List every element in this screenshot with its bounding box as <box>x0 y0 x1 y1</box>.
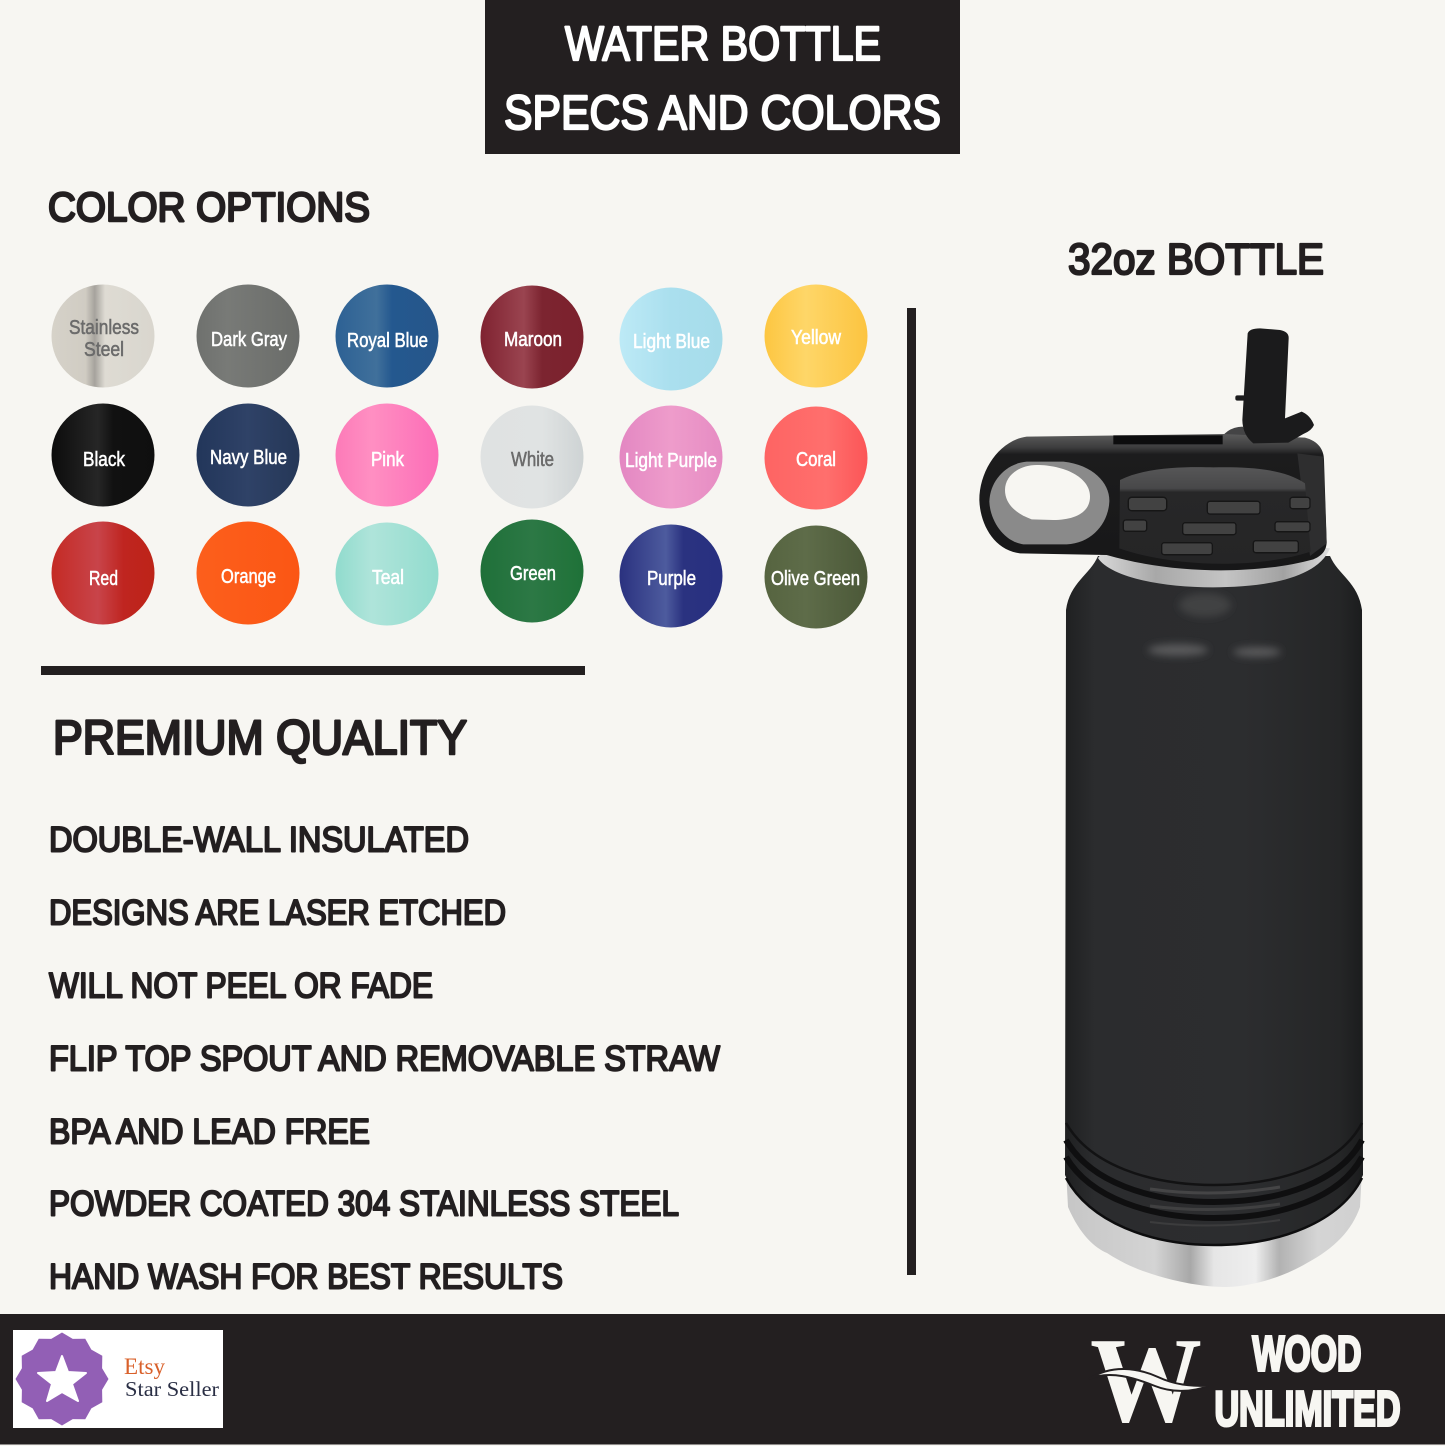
swatch: green <box>480 520 584 622</box>
swatch: stainless steel: Steel <box>84 338 124 361</box>
swatch: dark gray: Dark Gray <box>211 328 288 351</box>
icon: purple star seal <box>16 1332 108 1426</box>
swatch: royal blue: Royal Blue <box>347 329 428 352</box>
swatch: maroon: Maroon <box>504 328 562 351</box>
swatch: black: Black <box>83 448 126 471</box>
swatch: yellow <box>764 284 868 388</box>
heading: color options: COLOR OPTIONS <box>48 184 370 230</box>
swatch: navy blue: Navy Blue <box>210 446 287 469</box>
spout dome <box>1218 427 1256 443</box>
swatch: light purple <box>620 406 722 508</box>
straw <box>1235 328 1314 443</box>
wood unlimited logo <box>1089 1313 1400 1446</box>
swatch: royal blue <box>336 284 438 388</box>
swatch: coral <box>764 406 868 510</box>
swatch: red <box>52 522 154 624</box>
feature: will not peel: WILL NOT PEEL OR FADE <box>49 966 433 1006</box>
bottle body <box>1065 556 1363 1246</box>
swatch: stainless steel: Stainless <box>69 316 139 339</box>
swatch: red: Red <box>89 567 118 590</box>
swatch: purple <box>620 524 722 628</box>
lid shell <box>979 434 1327 570</box>
feature: bpa and lead free: BPA AND LEAD FREE <box>49 1112 370 1152</box>
grip dashes <box>1123 497 1310 555</box>
star seller label: Star Seller <box>125 1377 219 1401</box>
swatch: light purple: Light Purple <box>625 449 717 472</box>
etsy star seller badge <box>13 1330 223 1428</box>
feature: laser etched: DESIGNS ARE LASER ETCHED <box>49 894 506 932</box>
bottle steel base <box>1066 1170 1362 1287</box>
bottle lid and straw <box>979 328 1330 587</box>
title banner <box>485 0 960 154</box>
swatch: green: Green <box>510 562 556 585</box>
feature: flip top spout: FLIP TOP SPOUT AND REMOVABLE STRAW <box>49 1040 720 1078</box>
swatch: coral: Coral <box>796 448 836 471</box>
footer bar <box>0 1313 1445 1446</box>
swatch: pink: Pink <box>371 448 405 471</box>
logo W mark: W <box>1090 1313 1202 1446</box>
swatch: orange <box>196 522 300 624</box>
swatch: light blue: Light Blue <box>633 330 710 353</box>
swatch: light blue <box>620 288 722 390</box>
bottle ridges <box>1066 1123 1362 1245</box>
heading: 32oz bottle: 32oz BOTTLE <box>1068 235 1324 284</box>
feature list <box>49 820 720 1296</box>
handle ring <box>989 462 1109 544</box>
lid right facet <box>1297 453 1327 556</box>
handle opening <box>1005 465 1090 520</box>
cap grip <box>1119 467 1311 564</box>
swatch: purple: Purple <box>647 567 696 590</box>
bottle illustration <box>979 328 1363 1287</box>
swatch: navy blue <box>196 404 300 506</box>
body sheen <box>1148 593 1281 657</box>
swatch: yellow: Yellow <box>791 326 841 349</box>
heading: premium quality: PREMIUM QUALITY <box>53 712 467 765</box>
etsy label: Etsy <box>124 1354 166 1379</box>
swatch: pink <box>336 404 438 506</box>
swatch: orange: Orange <box>221 565 276 588</box>
logo swoosh <box>1089 1369 1208 1391</box>
feature: hand wash: HAND WASH FOR BEST RESULTS <box>49 1258 563 1296</box>
swatch: stainless steel <box>52 284 154 388</box>
swatch: white <box>480 406 584 508</box>
swatch: teal <box>336 522 438 626</box>
lid slot <box>1113 435 1223 444</box>
swatch: olive green: Olive Green <box>771 567 860 590</box>
feature: double-wall insulated: DOUBLE-WALL INSULATED <box>49 820 469 860</box>
swatch: black <box>52 404 154 506</box>
swatch: teal: Teal <box>372 566 404 589</box>
swatch: dark gray <box>196 284 300 388</box>
panel: color swatches <box>52 284 868 628</box>
swatch: olive green <box>764 526 868 628</box>
swatch: white: White <box>511 448 554 471</box>
feature: powder coated: POWDER COATED 304 STAINLESS STEEL <box>49 1184 679 1224</box>
logo wordmark: wood: WOOD <box>1252 1328 1362 1382</box>
title banner: SPECS AND COLORS <box>504 87 941 140</box>
swatch: maroon <box>480 286 584 388</box>
title banner: WATER BOTTLE <box>565 18 881 71</box>
steel neck ring <box>1098 543 1330 587</box>
